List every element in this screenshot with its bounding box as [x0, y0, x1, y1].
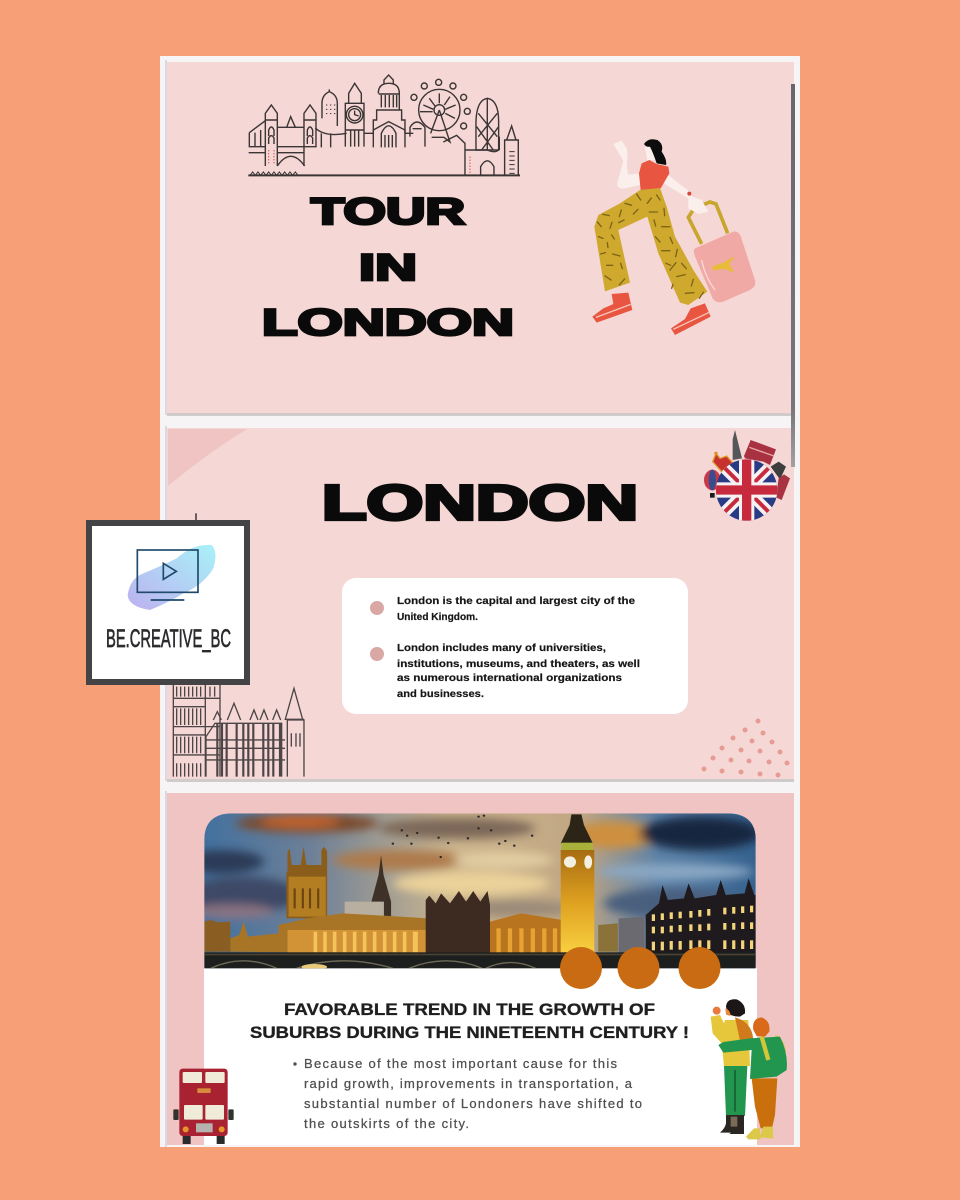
- main building: [204, 920, 230, 952]
- white content area: [204, 968, 757, 1145]
- illustration: woman traveller with suitcase: [592, 139, 755, 335]
- heading: favorable trend: SUBURBS DURING THE NINETEENTH CENTURY !: [250, 1023, 689, 1042]
- bullet two: [370, 647, 384, 661]
- scrollbar shadow on right edge: [791, 84, 795, 467]
- illustration: UK flag globe with landmarks: [704, 430, 790, 523]
- illustration: red double-decker bus: [173, 1069, 234, 1144]
- text: suburbs bullet: rapid growth, improvements in transportation, a: [304, 1076, 633, 1091]
- text: suburbs bullet: the outskirts of the city.: [304, 1116, 469, 1131]
- panel: suburbs slide: [165, 791, 794, 1147]
- Victoria tower: [286, 847, 327, 918]
- decorative dots: [702, 718, 790, 778]
- Big Ben: [561, 814, 593, 843]
- panel: London intro slide: [165, 426, 794, 782]
- illustration: two tourists with backpacks: [711, 999, 787, 1139]
- photo: Palace of Westminster at dusk: [179, 812, 761, 972]
- logo badge: be.creative_bc: [89, 523, 247, 682]
- text: suburbs bullet: [293, 1056, 642, 1131]
- text: institutions fact: [397, 642, 640, 700]
- central spire: [371, 855, 391, 918]
- text: suburbs bullet: Because of the most important cause for this: [304, 1056, 618, 1071]
- heading: favorable trend: [250, 1000, 689, 1042]
- illustration: Parliament line drawing: [173, 513, 304, 777]
- illustration: London skyline: [248, 75, 520, 175]
- text: suburbs bullet: substantial number of Londoners have shifted to: [304, 1096, 642, 1111]
- logo text: BE.CREATIVE_BC: [106, 625, 231, 653]
- heading: IN: IN: [359, 247, 417, 288]
- text: capital fact: [397, 595, 635, 623]
- corner decoration: [168, 429, 247, 486]
- heading: favorable trend: FAVORABLE TREND IN THE GROWTH OF: [284, 1000, 655, 1019]
- panel: title slide: [165, 60, 794, 416]
- birds: [392, 814, 533, 858]
- white frame behind slides: [160, 56, 800, 1147]
- bridge: [200, 952, 760, 969]
- right hand buildings: [598, 923, 618, 952]
- text: institutions fact: and businesses.: [397, 688, 484, 700]
- heading: LONDON: LONDON: [322, 476, 638, 530]
- text: institutions fact: as numerous international organizations: [397, 672, 622, 684]
- bullet one: [370, 601, 384, 615]
- heading: TOUR: TOUR: [311, 191, 465, 232]
- text: capital fact: United Kingdom.: [397, 611, 478, 623]
- heading: LONDON: LONDON: [262, 302, 514, 343]
- card: London facts: [342, 578, 688, 714]
- text: institutions fact: London includes many of universities,: [397, 642, 606, 654]
- decorative orange circles: [560, 947, 720, 989]
- icon: video monitor on blob: [128, 545, 215, 610]
- text: institutions fact: institutions, museums, and theaters, as well: [397, 658, 640, 670]
- text: capital fact: London is the capital and largest city of the: [397, 595, 635, 607]
